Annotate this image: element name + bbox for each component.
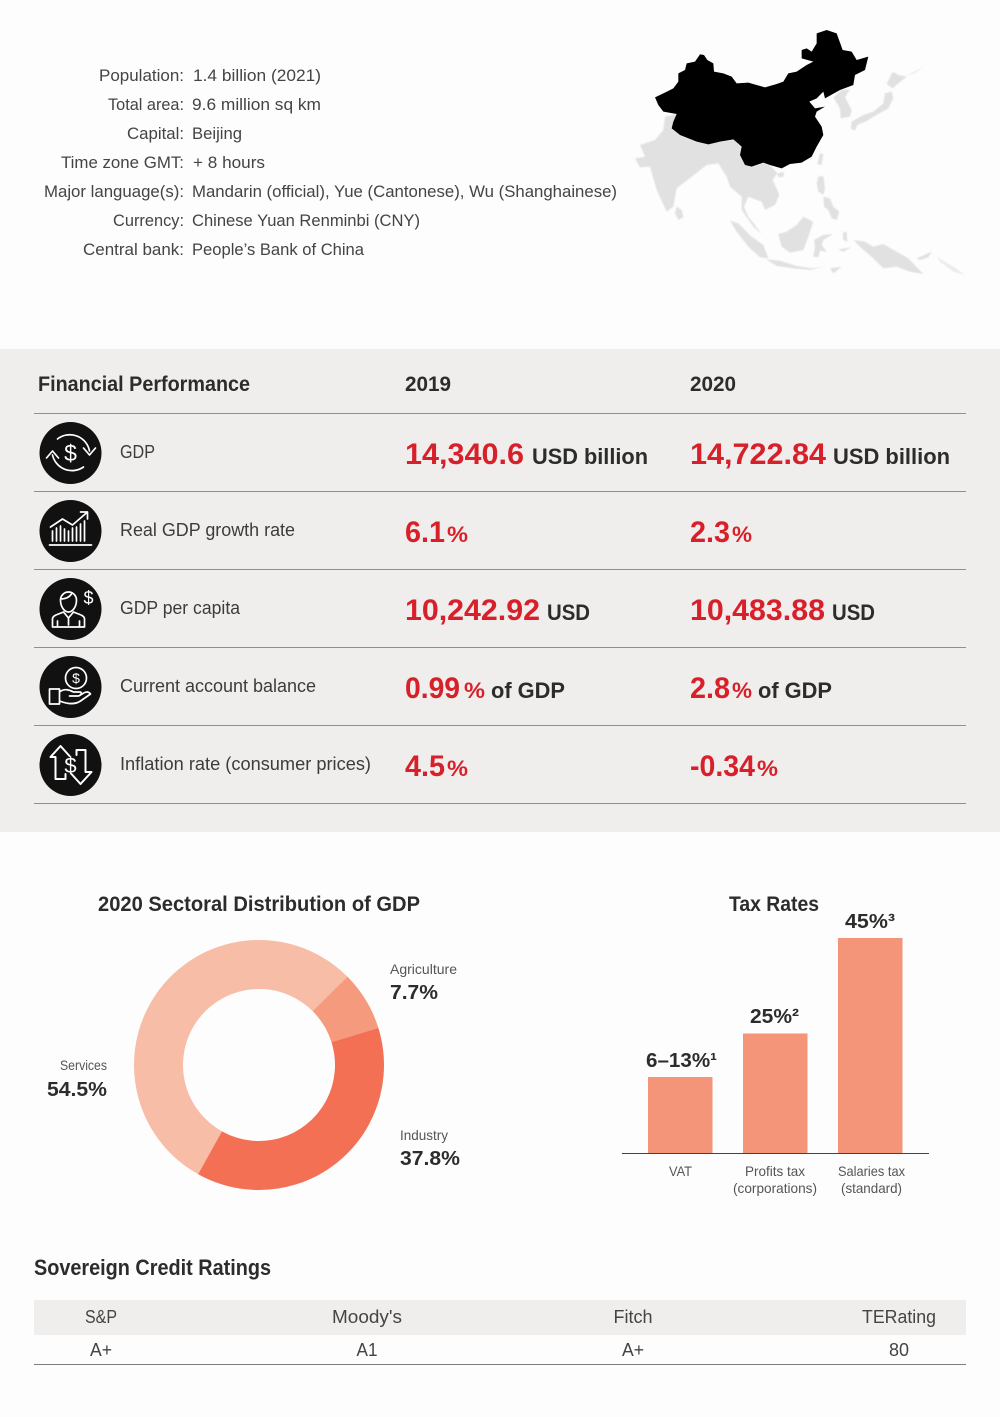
icon: growth chart [40, 500, 102, 562]
donut label: industry: Industry [400, 1127, 448, 1143]
value: current account 2019: % [464, 678, 485, 703]
donut label: industry: 37.8% [400, 1148, 460, 1170]
bar chart: tax rates: VAT [669, 1163, 692, 1179]
table: credit ratings: TERating [862, 1307, 936, 1327]
value: current account 2019: 0.99 [405, 672, 460, 705]
value: growth 2019: % [447, 522, 468, 547]
donut chart: GDP sectors [117, 923, 401, 1207]
value: current account 2019 [405, 672, 565, 705]
value: GDP 2019: 14,340.6 [405, 438, 524, 471]
bar chart: tax rates: Profits tax [745, 1163, 805, 1179]
value: current account 2020: of GDP [758, 678, 832, 703]
bar chart: tax rates [622, 911, 929, 1196]
panel: country facts: Time zone GMT: [61, 153, 184, 172]
table header: Financial Performance [38, 373, 250, 396]
donut label: services: Services [60, 1057, 107, 1073]
panel: financial performance [0, 349, 1000, 832]
donut label: services: 54.5% [47, 1079, 107, 1101]
value: growth 2020: 2.3 [690, 516, 730, 549]
table: credit ratings [34, 1300, 966, 1364]
value: GDP 2019 [405, 438, 648, 471]
panel: country facts: Currency: [113, 211, 184, 230]
value: per capita 2019: 10,242.92 [405, 594, 540, 627]
table: credit ratings: Fitch [614, 1307, 652, 1327]
panel: country facts: + 8 hours [193, 153, 265, 172]
donut label: industry [400, 1127, 460, 1170]
map: Asia with China highlighted [635, 30, 965, 275]
value: current account 2020: 2.8 [690, 672, 730, 705]
icon: GDP cycle [40, 422, 102, 484]
panel: country facts: 9.6 million sq km [192, 95, 321, 114]
icon: GDP cycle: $ [64, 440, 77, 466]
panel: country facts: Capital: [127, 124, 184, 143]
table: credit ratings: S&P [85, 1307, 117, 1327]
value: GDP 2020: 14,722.84 [690, 438, 826, 471]
icon: hand with coin: $ [72, 670, 80, 686]
table: credit ratings: A1 [356, 1340, 378, 1360]
bar chart: tax rates: Salaries tax [838, 1163, 905, 1179]
table: credit ratings: Moody's [332, 1307, 402, 1327]
icon: person with dollar [40, 578, 102, 640]
value: per capita 2020: USD [832, 600, 875, 625]
heading: sectoral distribution: 2020 Sectoral Distribution of GDP [98, 893, 420, 916]
donut label: agriculture [390, 961, 457, 1004]
panel: country facts: Central bank: [83, 240, 184, 259]
panel: country facts: Major language(s): [44, 182, 184, 201]
value: growth 2019: 6.1 [405, 516, 445, 549]
value: inflation 2019 [405, 750, 468, 783]
value: current account 2020: % [732, 678, 752, 703]
panel: country facts: 1.4 billion (2021) [193, 66, 321, 85]
table: credit ratings: 80 [889, 1340, 909, 1360]
value: per capita 2020: 10,483.88 [690, 594, 825, 627]
panel: country facts [44, 66, 617, 259]
panel: country facts: Population: [99, 66, 184, 85]
value: growth 2020 [690, 516, 752, 549]
table header: 2019 [405, 373, 451, 396]
donut label: agriculture: Agriculture [390, 961, 457, 977]
heading: sovereign credit ratings: Sovereign Credit Ratings [34, 1255, 271, 1280]
row label: real GDP growth: Real GDP growth rate [120, 520, 295, 540]
row label: GDP: GDP [120, 442, 155, 462]
row label: current account: Current account balance [120, 676, 316, 696]
row label: GDP per capita: GDP per capita [120, 598, 241, 618]
icon: inflation arrows: $ [64, 753, 77, 778]
bar chart: tax rates: (corporations) [733, 1180, 817, 1196]
heading: tax rates: Tax Rates [729, 893, 819, 916]
value: current account 2019: of GDP [491, 678, 565, 703]
bar chart: tax rates: 6–13%¹ [646, 1050, 717, 1072]
value: GDP 2020 [690, 438, 950, 471]
value: current account 2020 [690, 672, 832, 705]
panel: country facts: Total area: [108, 95, 184, 114]
table header [38, 373, 736, 396]
value: per capita 2019: USD [547, 600, 590, 625]
panel: country facts: Chinese Yuan Renminbi (CNY) [192, 211, 420, 230]
value: inflation 2019: % [447, 756, 468, 781]
value: inflation 2019: 4.5 [405, 750, 445, 783]
bar chart: tax rates: 45%³ [845, 911, 895, 933]
value: growth 2020: % [732, 522, 752, 547]
icon: inflation arrows [40, 734, 102, 796]
value: GDP 2019: USD billion [532, 444, 648, 469]
value: GDP 2020: USD billion [833, 444, 950, 469]
donut label: agriculture: 7.7% [390, 982, 438, 1004]
icon: hand with coin [40, 656, 102, 718]
row label: inflation: Inflation rate (consumer prices) [120, 754, 371, 774]
bar chart: tax rates: (standard) [841, 1180, 902, 1196]
table: credit ratings: A+ [622, 1340, 644, 1360]
value: growth 2019 [405, 516, 468, 549]
panel: country facts: People’s Bank of China [192, 240, 365, 259]
table: credit ratings: A+ [90, 1340, 112, 1360]
value: inflation 2020: % [757, 756, 778, 781]
bar chart: tax rates: 25%² [750, 1006, 799, 1028]
table header: 2020 [690, 373, 736, 396]
panel: country facts: Mandarin (official), Yue (Cantonese), Wu (Shanghainese) [192, 182, 617, 201]
donut label: services [47, 1057, 107, 1101]
icon: person with dollar: $ [83, 588, 94, 608]
panel: country facts: Beijing [192, 124, 242, 143]
value: inflation 2020: -0.34 [690, 750, 755, 783]
